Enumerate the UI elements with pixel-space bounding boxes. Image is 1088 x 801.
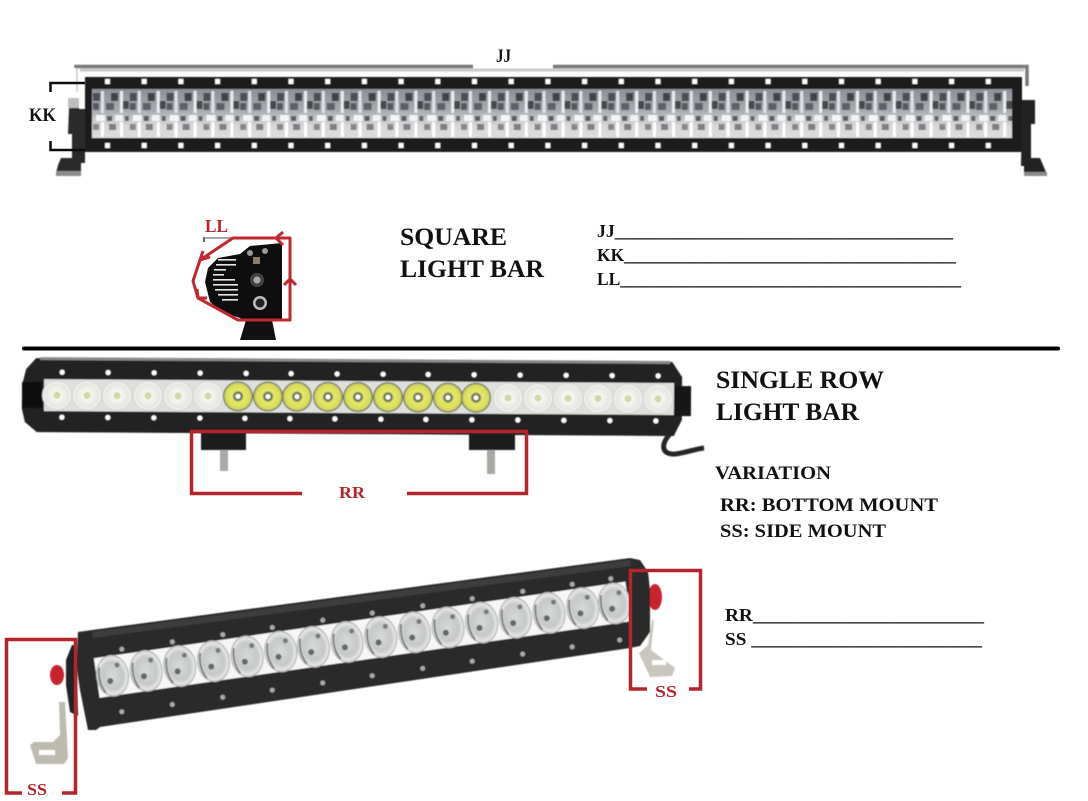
bracket: left SS: [6, 640, 76, 793]
label: JJ: JJ: [496, 46, 511, 67]
bracket: RR: [192, 432, 526, 494]
lens strip: [94, 582, 631, 698]
heading: square light bar: SQUARE: [400, 224, 507, 251]
lens strip: [44, 379, 674, 415]
heading: single row light bar: SINGLE ROW: [716, 367, 884, 394]
housing: [22, 358, 682, 436]
label: right SS: SS: [655, 682, 677, 701]
answer lines: RR SS: SS ________________________: [725, 629, 983, 649]
double row light bar photo: [56, 66, 1047, 176]
heading: square light bar: [400, 224, 545, 283]
end cap: [674, 386, 691, 416]
housing: [76, 558, 650, 730]
section divider: [22, 346, 1060, 350]
bracket: KK: [50, 83, 85, 150]
variation text: [715, 463, 938, 542]
single row light bar photo (bottom mount): [22, 357, 704, 474]
answer lines: JJ KK LL: [597, 221, 962, 289]
right mount: [1021, 100, 1046, 176]
right side bracket: [639, 584, 675, 677]
label: left SS: SS: [27, 780, 47, 799]
variation text: VARIATION: [715, 463, 831, 484]
answer lines: JJ KK LL: JJ______________________________________: [597, 221, 954, 241]
frame: [85, 77, 1022, 152]
heading: square light bar: LIGHT BAR: [400, 256, 545, 283]
label: LL: LL: [205, 216, 228, 236]
label: KK: KK: [29, 105, 56, 126]
LEDs: [93, 653, 132, 699]
variation text: SS: SIDE MOUNT: [720, 521, 886, 542]
answer lines: RR SS: RR________________________: [725, 605, 985, 625]
bracket: right SS: [630, 570, 700, 689]
screws: [110, 576, 622, 715]
left side bracket: [30, 645, 78, 764]
variation text: RR: BOTTOM MOUNT: [720, 495, 938, 516]
perimeter outline with arrows for LL: [193, 232, 296, 320]
answer lines: RR SS: [725, 605, 985, 649]
heading: single row light bar: [716, 367, 884, 426]
LEDs: [42, 381, 72, 410]
answer lines: JJ KK LL: KK______________________________________: [597, 245, 957, 265]
screws: [59, 370, 661, 423]
mounts: [201, 433, 515, 474]
label: RR: RR: [339, 483, 366, 502]
angled single row light bar photo (side mount): [30, 558, 675, 764]
grey width bracket for JJ: [76, 66, 1027, 86]
heading: single row light bar: LIGHT BAR: [716, 399, 860, 426]
answer lines: JJ KK LL: LL_______________________________________: [597, 269, 962, 289]
power cable: [664, 434, 704, 454]
left mount: [56, 108, 85, 173]
square light bar side view icon: [205, 243, 282, 340]
